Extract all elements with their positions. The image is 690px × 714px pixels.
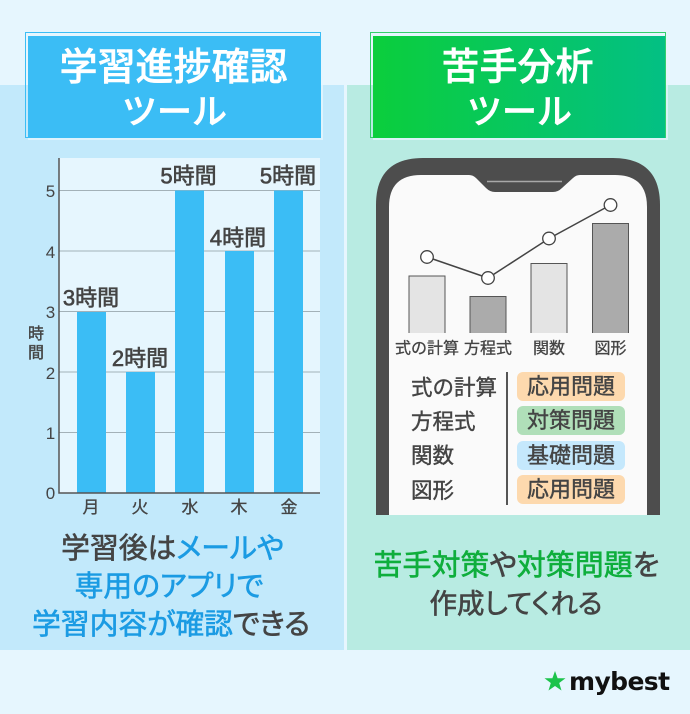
caption: weakness analysis tool (373, 550, 660, 619)
bar chart: study hours per weekday: 5時間 (160, 164, 217, 188)
phone chart: 図形 (594, 340, 627, 358)
panel: weakness analysis tool (347, 85, 690, 650)
logo: mybest: mybest (569, 667, 669, 696)
bar chart: study hours per weekday: 4 (46, 243, 55, 262)
heading: learning progress tool (25, 32, 323, 140)
heading: weakness analysis tool (370, 32, 668, 140)
bar chart: study hours per weekday: 木 (230, 498, 248, 517)
bar chart: study hours per weekday: 3時間 (63, 286, 119, 310)
tag: applied problems: 応用問題 (527, 477, 615, 502)
icon: star (544, 671, 566, 690)
caption: learning progress tool: 専用のアプリで (75, 571, 263, 603)
phone mockup (376, 158, 660, 515)
bar chart: study hours per weekday: 時 (28, 325, 44, 343)
heading: weakness analysis tool: 苦手分析 (441, 47, 594, 89)
caption: learning progress tool (32, 533, 310, 641)
bar chart: study hours per weekday: 水 (182, 498, 198, 517)
heading: weakness analysis tool: ツール (467, 93, 572, 132)
bar chart: study hours per weekday: 火 (132, 498, 148, 517)
heading: learning progress tool: 学習進捗確認 (59, 47, 288, 89)
bar chart: study hours per weekday: 2時間 (112, 346, 168, 371)
panel: learning progress tool (0, 85, 344, 650)
bar chart: study hours per weekday: 1 (46, 424, 55, 443)
subject: figures: 図形 (411, 478, 454, 502)
bar chart: study hours per weekday: 間 (28, 345, 44, 362)
phone chart: 関数 (533, 340, 565, 358)
subject: equations expression: 式の計算 (411, 376, 497, 400)
tag: basic problems: 基礎問題 (527, 443, 615, 468)
bar chart: study hours per weekday: 4時間 (210, 226, 266, 250)
bar chart: study hours per weekday: 2 (46, 364, 55, 383)
subject: equations: 方程式 (411, 410, 476, 434)
caption: weakness analysis tool: 苦手対策や対策問題を (373, 550, 660, 582)
phone frame (376, 158, 660, 515)
bar chart: study hours per weekday: 5時間 (260, 164, 316, 188)
caption: learning progress tool: 学習後はメールや (61, 533, 284, 565)
tag: applied problems: 応用問題 (527, 374, 615, 399)
bar chart: study hours per weekday (28, 158, 320, 517)
bar chart: study hours per weekday: 0 (46, 484, 55, 503)
caption: weakness analysis tool: 作成してくれる (430, 588, 602, 619)
bar chart: study hours per weekday: 5 (46, 182, 55, 201)
bar chart: study hours per weekday: 月 (82, 498, 100, 517)
phone chart: 式の計算 (395, 338, 459, 358)
subject: functions: 関数 (411, 444, 454, 468)
heading: learning progress tool: ツール (122, 93, 227, 132)
bar chart: study hours per weekday: 金 (280, 498, 298, 517)
phone chart (395, 198, 629, 358)
tag: targeted problems: 対策問題 (527, 408, 615, 433)
bar chart: study hours per weekday: 3 (46, 303, 55, 322)
phone chart: 方程式 (464, 340, 512, 358)
caption: learning progress tool: 学習内容が確認できる (32, 609, 310, 641)
